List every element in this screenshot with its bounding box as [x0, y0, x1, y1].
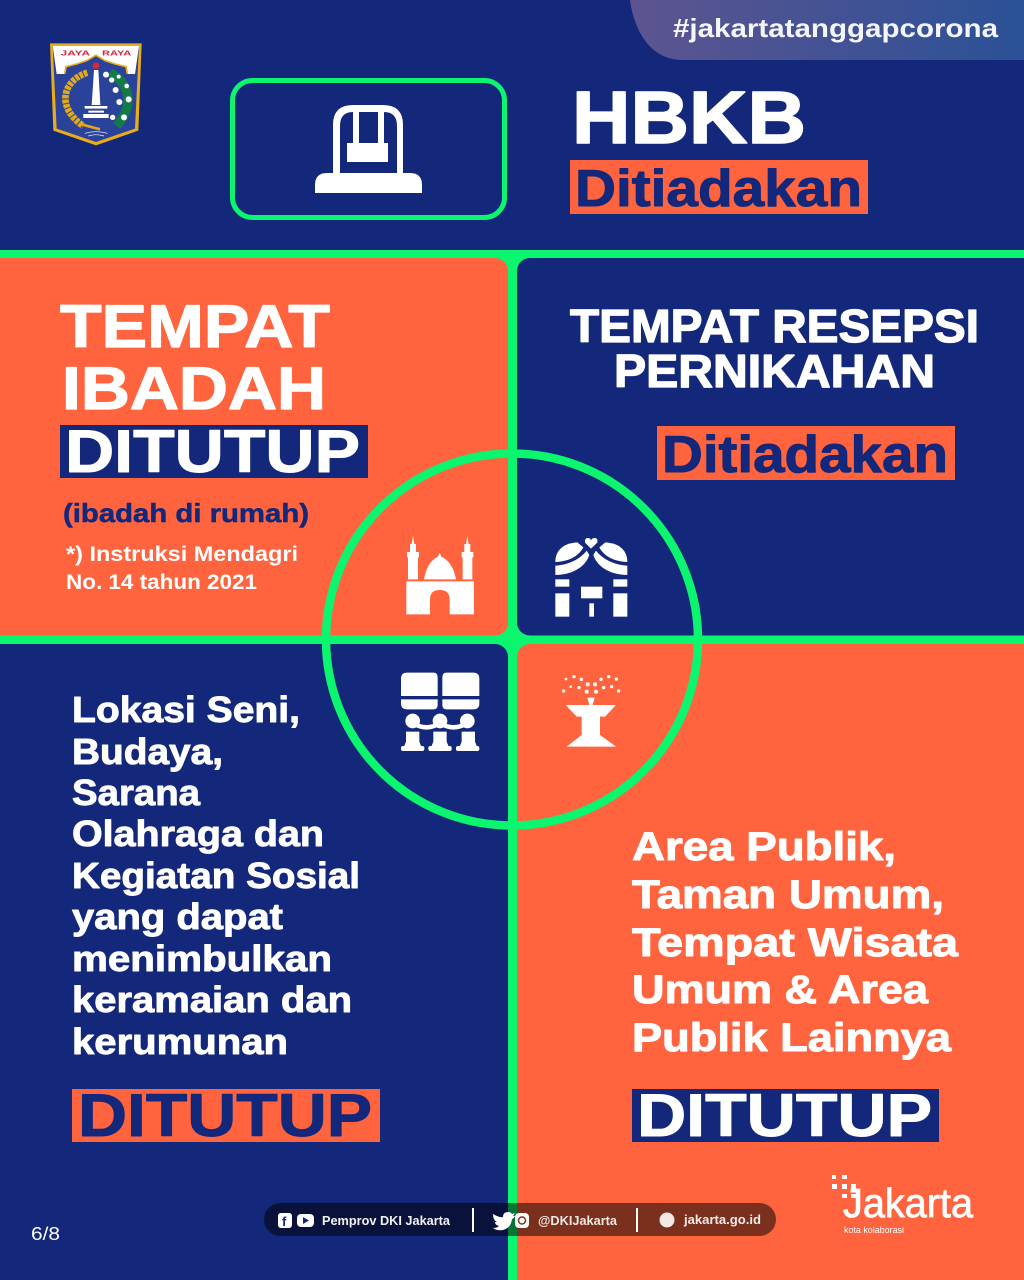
label: ditutup: DITUTUP	[78, 1082, 372, 1149]
panel: tempat resepsi pernikahan	[517, 258, 1024, 636]
note: ibadah di rumah: (ibadah di rumah)	[63, 498, 309, 528]
text: area publik list: Taman Umum,	[632, 873, 944, 917]
heading: tempat resepsi pernikahan: PERNIKAHAN	[614, 345, 935, 397]
note: instruksi mendagri	[66, 543, 298, 594]
text: lokasi seni budaya list: Budaya,	[72, 731, 223, 772]
icon: facebook	[278, 1213, 292, 1229]
text: dki jakarta handle: @DKIJakarta	[538, 1214, 618, 1228]
text: lokasi seni budaya list: keramaian dan	[72, 979, 352, 1020]
hashtag tab: #jakartatanggapcorona	[673, 13, 999, 43]
text: lokasi seni budaya list: Kegiatan Sosial	[72, 855, 360, 896]
header icon box	[232, 80, 504, 218]
heading: tempat resepsi pernikahan	[570, 300, 979, 397]
icon: theatre	[401, 673, 479, 751]
icon: Jakarta coat of arms: RAYA	[102, 48, 132, 57]
icon: wedding arch	[555, 538, 627, 617]
label: ditutup: DITUTUP	[637, 1082, 932, 1149]
text: lokasi seni budaya list: kerumunan	[72, 1021, 288, 1062]
icon: instagram	[515, 1213, 529, 1228]
text: website: jakarta.go.id	[683, 1213, 761, 1227]
icon: fountain	[562, 675, 620, 747]
logo: jakarta kota kolaborasi: Jakarta	[843, 1180, 973, 1226]
page number: 6/8	[31, 1224, 60, 1244]
text: lokasi seni budaya list: Lokasi Seni,	[72, 689, 300, 730]
icon: globe	[660, 1212, 674, 1228]
icon: mosque	[406, 536, 474, 614]
heading: tempat resepsi pernikahan: TEMPAT RESEPSI	[570, 300, 979, 352]
text: area publik list: Area Publik,	[632, 825, 896, 869]
title: HBKB: HBKB	[572, 76, 806, 159]
icon: Jakarta coat of arms	[50, 43, 142, 145]
label: ditutup: DITUTUP	[65, 418, 360, 485]
text: area publik list: Publik Lainnya	[632, 1016, 952, 1060]
icon: mihrab	[315, 105, 422, 193]
center green ring	[326, 454, 698, 826]
text: pemprov: Pemprov DKI Jakarta	[322, 1214, 451, 1228]
panel: tempat ibadah	[0, 258, 508, 636]
text: area publik list: Umum & Area	[632, 968, 929, 1012]
label: ditiadakan: Ditiadakan	[662, 426, 948, 484]
note: instruksi mendagri: No. 14 tahun 2021	[66, 571, 257, 594]
heading: tempat ibadah: TEMPAT	[60, 293, 330, 360]
text: lokasi seni budaya list: Olahraga dan	[72, 813, 324, 854]
hashtag tab	[630, 0, 1024, 60]
text: area publik list	[632, 825, 959, 1060]
text: lokasi seni budaya list	[72, 689, 360, 1062]
heading: tempat ibadah	[60, 293, 330, 422]
footer social bar	[264, 1203, 776, 1236]
panel: area publik	[517, 644, 1024, 1280]
logo: jakarta kota kolaborasi: kota kolaborasi	[844, 1225, 904, 1235]
text: lokasi seni budaya list: yang dapat	[72, 896, 283, 937]
logo: jakarta kota kolaborasi	[832, 1175, 973, 1235]
heading: tempat ibadah: IBADAH	[62, 355, 326, 422]
icon: Jakarta coat of arms: JAYA	[61, 48, 91, 57]
panel: lokasi seni budaya	[0, 644, 508, 1280]
text: lokasi seni budaya list: Sarana	[72, 772, 201, 813]
header label: Ditiadakan: Ditiadakan	[575, 160, 862, 218]
icon: youtube	[297, 1214, 314, 1227]
icon: twitter	[493, 1212, 515, 1230]
text: lokasi seni budaya list: menimbulkan	[72, 938, 332, 979]
text: area publik list: Tempat Wisata	[632, 921, 959, 965]
note: instruksi mendagri: *) Instruksi Mendagri	[66, 543, 298, 566]
icon: facebook: f	[282, 1214, 287, 1229]
